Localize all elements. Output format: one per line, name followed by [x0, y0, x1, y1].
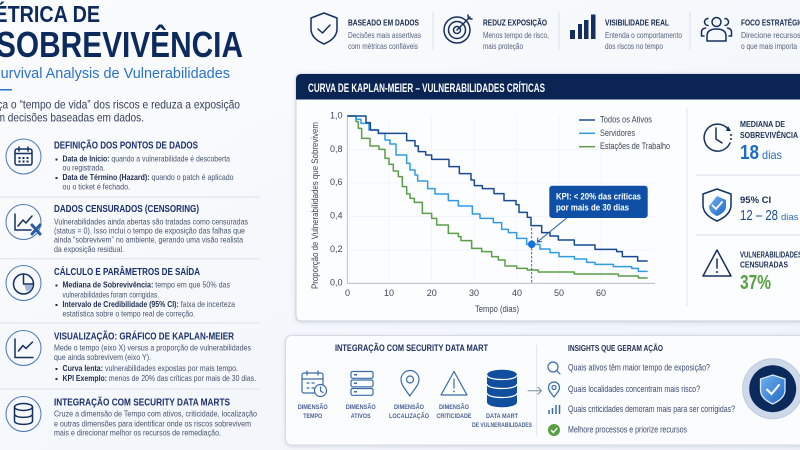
- panel: definição dos pontos de dados: [6, 138, 234, 192]
- icon: clock: [704, 124, 732, 151]
- title: [0, 0, 243, 65]
- icon: calendar: [6, 139, 41, 174]
- text block: Cruze a dimensão de Tempo com ativos, criticidade, localização: [54, 409, 257, 419]
- dimension: tempo: [298, 371, 328, 420]
- icon: warning: [703, 250, 731, 276]
- benefit: visibilidade real: Entenda o comportamento: [605, 31, 682, 40]
- insight: localidades: [548, 382, 700, 397]
- heading: VISUALIZAÇÃO: GRÁFICO DE KAPLAN-MEIER: [54, 330, 234, 342]
- accent line: [0, 89, 12, 90]
- benefit: reduz exposição: REDUZ EXPOSIÇÃO: [483, 18, 547, 28]
- text block: Data de Início: quando a vulnerabilidade é descoberta: [62, 154, 230, 164]
- heading: INTEGRAÇÃO COM SECURITY DATA MART: [335, 343, 488, 353]
- stat: mediana de sobrevivência: [704, 119, 798, 164]
- data mart cylinder: DATA MART: [486, 413, 519, 420]
- curve: estações de trabalho: [347, 116, 648, 278]
- insights heading: INSIGHTS QUE GERAM AÇÃO: [568, 343, 663, 353]
- benefit: reduz exposição: Menos tempo de risco,: [483, 31, 549, 40]
- y axis labels: 1,0: [330, 110, 343, 120]
- x axis labels: 30: [469, 288, 479, 298]
- kpi arrow: [537, 218, 567, 242]
- x axis labels: 50: [554, 288, 564, 298]
- stat: 95% ci: [703, 189, 799, 224]
- text block: [54, 342, 256, 383]
- curves: [347, 116, 648, 278]
- panel: security data mart integration: [286, 336, 800, 445]
- text block: Mede o tempo (eixo X) versus a proporção de vulnerabilidades: [54, 342, 251, 352]
- text block: [54, 216, 248, 254]
- dimension: tempo: TEMPO: [303, 413, 322, 420]
- y axis title: Proporção de Vulnerabilidades que Sobrevivem: [310, 122, 320, 289]
- axes: [347, 116, 655, 283]
- icon: pie chart: [6, 266, 41, 300]
- x axis labels: 20: [427, 288, 437, 298]
- panel: kaplan-meier chart: [296, 74, 800, 321]
- text block: KPI Exemplo: menos de 20% das críticas por mais de 30 dias.: [62, 373, 256, 383]
- x axis labels: 60: [596, 288, 606, 298]
- x axis labels: 0: [345, 288, 350, 298]
- text block: [56, 280, 235, 318]
- text block: Vulnerabilidades ainda abertas são tratadas como censuradas: [54, 216, 248, 226]
- gridlines: [348, 116, 655, 283]
- panel: dados censurados: [6, 203, 248, 254]
- dimension: criticidade: [436, 372, 472, 420]
- chart header: [296, 74, 800, 100]
- data mart cylinder: [472, 370, 532, 429]
- benefit: visibilidade real: [605, 18, 682, 51]
- text block: vulnerabilidades foram corrigidas.: [62, 290, 159, 300]
- panel: cálculo e parâmetros: [6, 265, 235, 318]
- benefit: baseado em dados: BASEADO EM DADOS: [348, 18, 419, 28]
- benefit: reduz exposição: [483, 18, 549, 51]
- icon: shield check: [311, 13, 337, 44]
- top benefits band: [311, 12, 800, 51]
- stat: vulnerabilidades censuradas: [703, 250, 800, 294]
- icon: shield: [703, 189, 731, 221]
- text block: Intervalo de Credibilidade (95% CI): faixa de incerteza: [62, 299, 235, 309]
- dimension: tempo: DIMENSÃO: [298, 402, 328, 411]
- heading: DADOS CENSURADOS (CENSORING): [54, 203, 199, 215]
- dimension: ativos: ATIVOS: [351, 413, 371, 420]
- x axis labels: [345, 288, 606, 298]
- benefit: baseado em dados: Decisões mais assertivas: [348, 31, 421, 40]
- kpi marker line: [531, 228, 533, 284]
- kpi callout: [549, 186, 648, 218]
- stat: 95% ci: 95% CI: [740, 195, 771, 206]
- y axis labels: 0,2: [330, 244, 343, 254]
- benefit: reduz exposição: mais proteção: [483, 42, 523, 51]
- stat: 95% ci: 12 – 28: [740, 208, 778, 224]
- benefit: visibilidade real: dos riscos no tempo: [605, 42, 663, 51]
- x axis labels: 40: [512, 288, 522, 298]
- insight: ativos: [548, 362, 710, 374]
- text block: Data de Término (Hazard): quando o patch é aplicado: [62, 172, 234, 182]
- icon: people: [702, 18, 732, 41]
- stat: vulnerabilidades censuradas: CENSURADAS: [740, 261, 789, 270]
- text block: Curva lenta: vulnerabilidades expostas por mais tempo.: [62, 363, 238, 373]
- benefit: baseado em dados: com métricas confiáveis: [348, 42, 418, 51]
- text block: [56, 154, 234, 192]
- kpi callout: KPI: < 20% das críticas: [556, 191, 641, 202]
- text block: Mediana de Sobrevivência: tempo em que 50% das: [62, 280, 230, 290]
- stat: vulnerabilidades censuradas: 37%: [740, 272, 771, 294]
- text block: [54, 409, 257, 438]
- icon: database: [6, 396, 41, 432]
- y axis labels: 0,0: [330, 278, 343, 288]
- curve: todos os ativos: [347, 116, 648, 261]
- text block: que ainda sobrevivem (eixo Y).: [54, 352, 151, 362]
- stat: 95% ci: dias: [781, 212, 799, 223]
- dimension: ativos: [346, 372, 376, 420]
- heading: CÁLCULO E PARÂMETROS DE SAÍDA: [54, 265, 200, 278]
- kpi callout: por mais de 30 dias: [556, 202, 629, 213]
- text block: mais e direcionar melhor os recursos de remediação.: [54, 428, 221, 438]
- stat: mediana de sobrevivência: dias: [762, 148, 782, 162]
- y axis labels: 0,8: [330, 144, 343, 154]
- shield badge: [743, 359, 800, 419]
- dimension: localização: DIMENSÃO: [394, 402, 424, 411]
- icon: target: [444, 15, 472, 43]
- curve: servidores: [347, 116, 648, 271]
- benefit: foco estratégico: [741, 18, 800, 51]
- insight: recursos: Melhore processos e priorize recursos: [568, 425, 687, 435]
- stat: mediana de sobrevivência: 18: [740, 142, 759, 164]
- panel: integração: [6, 396, 257, 438]
- text block: e outras dimensões para identificar onde os riscos sobrevivem: [54, 419, 251, 429]
- stat: mediana de sobrevivência: MEDIANA DE: [740, 119, 785, 129]
- icon: chart with x: [6, 204, 41, 240]
- text block: ou registrada.: [62, 163, 105, 173]
- heading: DEFINIÇÃO DOS PONTOS DE DADOS: [54, 138, 198, 152]
- text block: ou o ticket é fechado.: [62, 182, 130, 192]
- benefit: baseado em dados: [348, 18, 421, 51]
- legend: [579, 114, 670, 151]
- legend: Servidores: [600, 128, 635, 138]
- arrow: [528, 387, 542, 394]
- insight: ativos: Quais ativos têm maior tempo de exposição?: [568, 363, 710, 373]
- y axis labels: 0,6: [330, 177, 343, 187]
- legend: Todos os Ativos: [600, 114, 652, 124]
- legend: Estações de Trabalho: [600, 141, 670, 151]
- icon: line chart: [6, 330, 41, 366]
- dimension: criticidade: CRITICIDADE: [436, 413, 472, 420]
- insight: recursos: [548, 424, 687, 436]
- kpi marker dot: [528, 240, 536, 248]
- x axis labels: 10: [384, 288, 394, 298]
- y axis labels: [330, 110, 343, 288]
- text block: da exposição residual.: [54, 244, 124, 254]
- dimension: criticidade: DIMENSÃO: [439, 402, 469, 411]
- text block: estatística sobre o tempo real de correção.: [62, 308, 195, 318]
- x axis title: Tempo (dias): [475, 304, 519, 314]
- icon: bars: [570, 14, 596, 39]
- insight: localidades: Quais localidades concentram mais risco?: [568, 384, 700, 394]
- data mart cylinder: DE VULNERABILIDADES: [472, 422, 532, 429]
- text block: ainda “sobrevivem” no ambiente, gerando uma visão realista: [54, 235, 243, 245]
- dimension: ativos: DIMENSÃO: [346, 402, 376, 411]
- heading: INTEGRAÇÃO COM SECURITY DATA MARTS: [54, 396, 230, 409]
- y axis labels: 0,4: [330, 210, 343, 220]
- dimension: localização: [389, 370, 429, 420]
- insight: criticidades: Quais criticidades demoram mais para ser corrigidas?: [568, 404, 735, 414]
- dimension: localização: LOCALIZAÇÃO: [389, 411, 429, 420]
- benefit: visibilidade real: VISIBILIDADE REAL: [605, 18, 669, 28]
- text block: (status = 0). Isso inclui o tempo de exposição das falhas que: [54, 226, 245, 236]
- title: SOBREVIVÊNCIA: [0, 23, 243, 65]
- chart header: CURVA DE KAPLAN-MEIER – VULNERABILIDADES CRÍTICAS: [308, 82, 545, 95]
- intro text: [0, 98, 240, 124]
- panel: visualização: [6, 330, 256, 383]
